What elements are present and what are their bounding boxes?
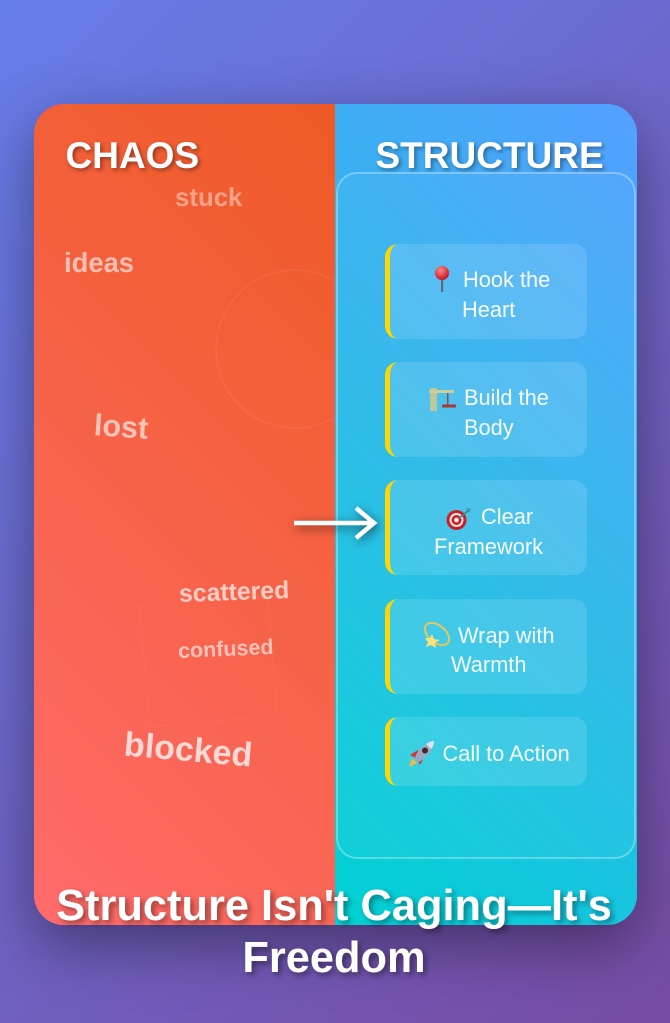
card: hook the heart [385,244,587,339]
decorative circle outline [215,269,375,429]
text: build the body [464,385,549,440]
heading: chaos: CHAOS [66,135,199,176]
word: confused: confused [177,635,274,663]
main container shadow [34,104,637,925]
text: hook the heart: Heart [462,296,515,322]
text: wrap with warmth [451,623,555,677]
heading: structure: STRUCTURE [376,135,604,176]
panel: glass framework [336,172,636,859]
card: build the body [385,362,587,457]
card: clear framework [385,480,587,575]
text: hook the heart: Hook the [463,267,550,292]
text: call to action: Call to Action [442,740,570,766]
word: stuck: stuck [175,184,242,212]
title: Structure Isn't Caging—It's [56,882,612,930]
text: wrap with warmth: Warmth [451,652,526,677]
text: build the body: Build the [464,385,549,410]
text: clear framework [434,504,543,558]
title [56,882,616,982]
card: wrap with warmth [385,599,587,694]
title: Freedom [242,934,426,982]
icon: target [446,508,471,530]
icon: crane [429,388,456,411]
panel: chaos [34,104,335,925]
word: ideas: ideas [64,247,134,278]
arrow [292,505,384,547]
decorative square outline [139,596,278,727]
text: clear framework: Framework [434,534,543,558]
text: clear framework: Clear [481,504,533,529]
word: lost: lost [93,408,149,446]
word: blocked: blocked [123,725,254,775]
word: scattered: scattered [179,577,290,608]
icon: pin [435,266,449,292]
icon: dizzy star [424,622,450,648]
text: wrap with warmth: Wrap with [458,623,555,648]
panel: structure [335,104,637,925]
icon: rocket [409,741,434,767]
text: hook the heart [462,267,550,322]
card: call to action [385,717,587,786]
text: build the body: Body [464,414,514,440]
